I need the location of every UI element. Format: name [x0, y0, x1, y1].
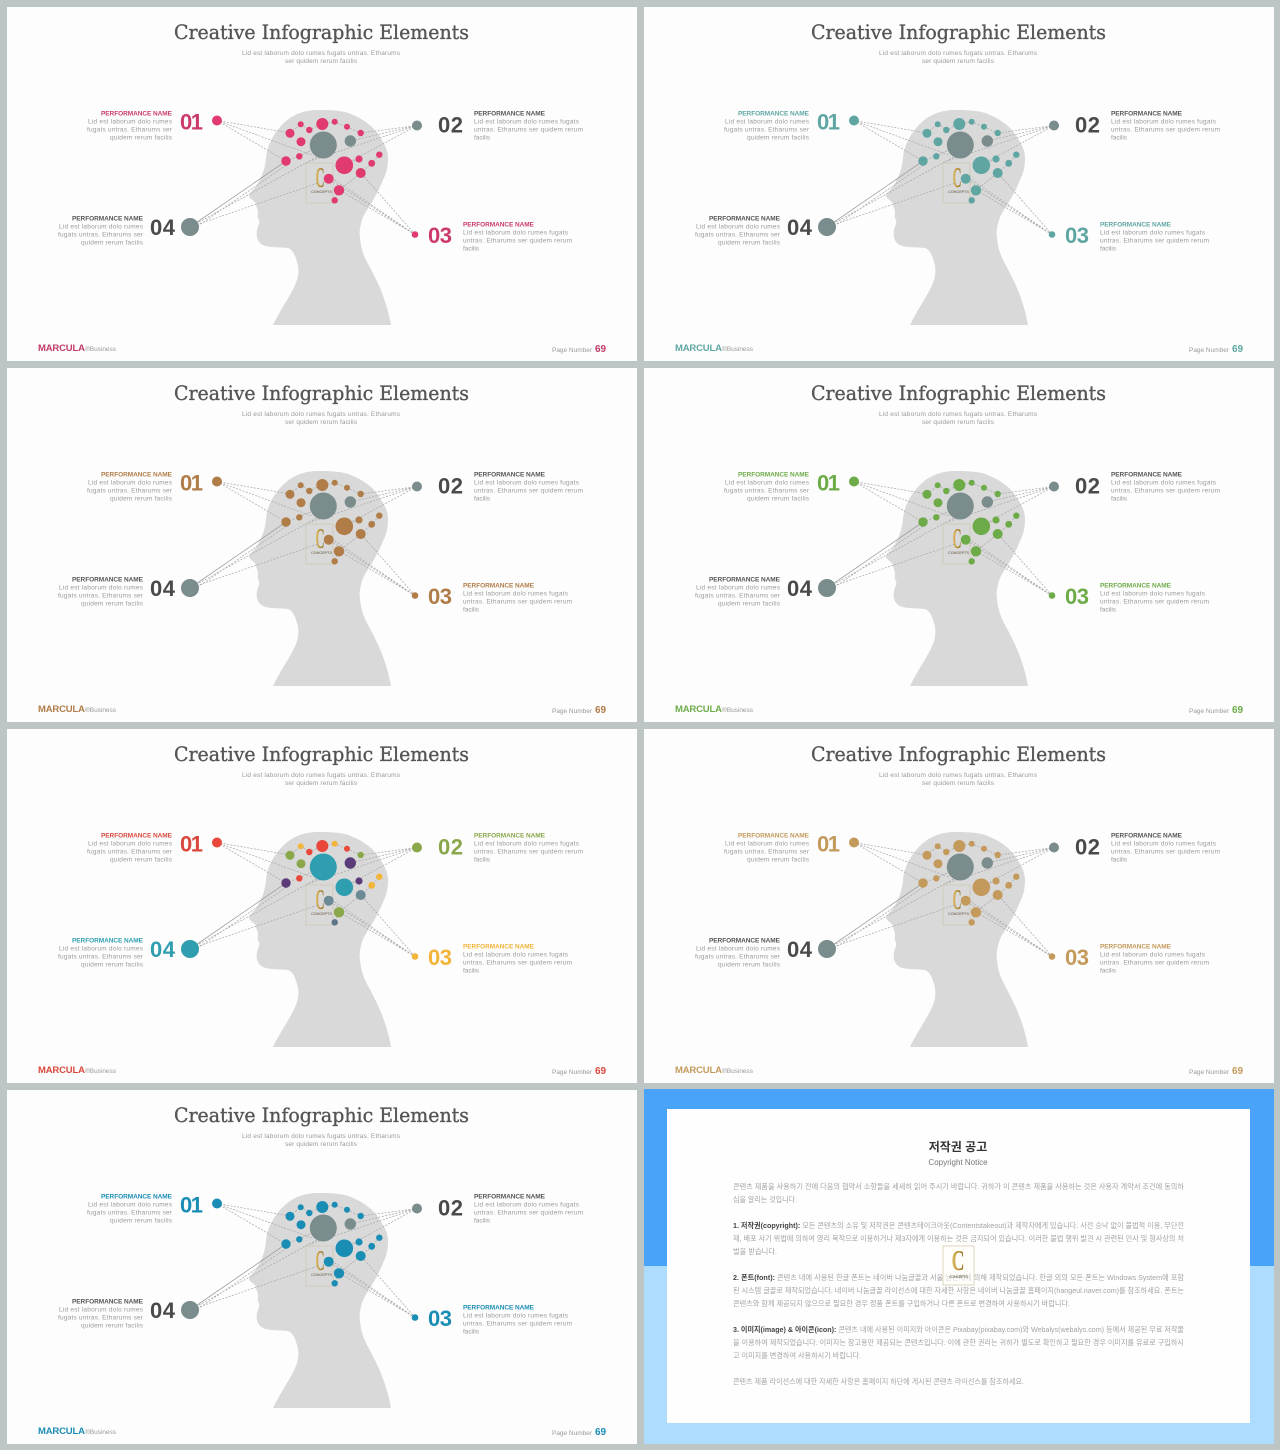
subtitle: Lid est laborum dolo rumes fugats untras. Etharums: [242, 411, 401, 418]
label 02: Lid est laborum dolo rumes fugats: [474, 1202, 580, 1208]
panel 5: multicolour: [7, 729, 637, 1083]
label 01: quidem rerum facilis: [110, 496, 173, 502]
label 03: 03: [1065, 584, 1089, 609]
label 01: Lid est laborum dolo rumes: [725, 118, 810, 126]
panel 8: copyright notice: [644, 1089, 1274, 1444]
footer: 69: [595, 344, 606, 355]
subtitle: Lid est laborum dolo rumes fugats untras. Etharums: [242, 772, 401, 779]
label 01: fugats untras. Etharums ser: [724, 848, 810, 856]
label 02: facilis: [1111, 134, 1128, 142]
footer: 69: [595, 1066, 606, 1077]
footer: MARCULA: [38, 343, 85, 354]
label 04: PERFORMANCE NAME: [72, 216, 144, 222]
notice body: 1. 저작권(copyright): 모든 콘텐츠의 소유 및 저작권은 콘텐츠테이크아웃(Contentstakeout)과 제작자에게 있습니다. 사전 승낙 없이 불법적 이용, 무단전: [733, 1220, 1184, 1230]
label 01: PERFORMANCE NAME: [101, 110, 173, 118]
head with nodes: [818, 110, 1059, 325]
label 04: 04: [787, 937, 813, 962]
label 01: 01: [817, 110, 840, 134]
label 03: facilis: [1100, 968, 1117, 974]
subtitle: [242, 50, 401, 65]
label 01: Lid est laborum dolo rumes: [88, 840, 173, 848]
subtitle: ser quidem rerum facilis: [922, 780, 995, 787]
label 04: fugats untras. Etharums ser: [695, 592, 781, 600]
label 02: PERFORMANCE NAME: [1111, 472, 1183, 478]
panel 6: tan: [644, 729, 1274, 1083]
head with nodes: [181, 471, 422, 686]
label 02: 02: [1075, 112, 1100, 138]
label 01: quidem rerum facilis: [110, 856, 173, 864]
label 03: facilis: [463, 968, 480, 974]
label 01: 01: [817, 832, 840, 856]
label 03: [428, 1304, 572, 1336]
label 04: PERFORMANCE NAME: [72, 576, 144, 584]
panel 2: teal: [644, 7, 1274, 361]
label 03: untras. Etharums ser quidem rerum: [1100, 238, 1209, 244]
label 02: untras. Etharums ser quidem rerum: [474, 126, 583, 134]
label 04: quidem rerum facilis: [81, 600, 144, 608]
label 03: [1065, 944, 1209, 974]
notice body: 콘텐츠 제품 라이선스에 대한 자세한 사항은 홈페이지 하단에 게시된 콘텐츠 라이선스를 참조하세요.: [733, 1376, 1024, 1386]
title: Creative Infographic Elements: [811, 382, 1106, 405]
label 03: [428, 944, 572, 974]
label 03: 03: [428, 584, 452, 609]
label 04: fugats untras. Etharums ser: [58, 954, 144, 960]
label 04: Lid est laborum dolo rumes: [59, 224, 144, 230]
label 03: PERFORMANCE NAME: [1100, 944, 1172, 950]
watermark logo: CONCEPTS: [949, 1274, 968, 1279]
footer: MARCULA: [675, 704, 722, 715]
label 02: [438, 110, 583, 142]
label 03: PERFORMANCE NAME: [463, 1304, 535, 1312]
footer: [38, 704, 606, 716]
label 03: PERFORMANCE NAME: [1100, 222, 1172, 228]
label 02: PERFORMANCE NAME: [474, 110, 546, 118]
label 03: [1065, 582, 1209, 614]
label 01: PERFORMANCE NAME: [101, 472, 173, 478]
label 01: quidem rerum facilis: [110, 134, 173, 142]
label 02: facilis: [474, 134, 491, 142]
label 04: quidem rerum facilis: [718, 240, 781, 246]
label 01: [87, 470, 203, 502]
footer: MARCULA: [38, 1426, 85, 1437]
label 01: quidem rerum facilis: [747, 134, 810, 142]
watermark logo: [943, 1246, 974, 1285]
panel 7: blue: [7, 1090, 637, 1444]
label 03: [428, 582, 572, 614]
label 04: 04: [150, 215, 176, 240]
notice heading: Copyright Notice: [928, 1158, 988, 1167]
label 01: PERFORMANCE NAME: [738, 110, 810, 118]
label 02: PERFORMANCE NAME: [474, 1194, 546, 1200]
footer: 69: [595, 1427, 606, 1438]
label 04: Lid est laborum dolo rumes: [696, 584, 781, 592]
label 01: [724, 110, 840, 142]
head with nodes: [181, 1193, 422, 1408]
subtitle: [242, 1133, 401, 1148]
footer: 69: [595, 705, 606, 716]
label 02: 02: [438, 474, 463, 498]
footer: ®Business: [85, 1067, 117, 1075]
label 01: 01: [180, 1192, 203, 1218]
label 03: facilis: [463, 606, 480, 614]
label 03: [1065, 222, 1209, 252]
label 03: facilis: [463, 246, 480, 252]
label 04: PERFORMANCE NAME: [709, 576, 781, 584]
footer: ®Business: [722, 1067, 754, 1075]
label 01: fugats untras. Etharums ser: [87, 1210, 173, 1216]
label 03: facilis: [463, 1328, 480, 1336]
label 02: untras. Etharums ser quidem rerum: [1111, 488, 1220, 494]
subtitle: [879, 772, 1038, 787]
label 03: Lid est laborum dolo rumes fugats: [1100, 590, 1206, 598]
subtitle: ser quidem rerum facilis: [922, 419, 995, 426]
label 04: [58, 215, 176, 246]
footer: 69: [1232, 1066, 1243, 1077]
panel 4: green: [644, 368, 1274, 722]
notice body: 고 이미지를 변경하여 사용하시기 바랍니다.: [733, 1350, 861, 1360]
subtitle: ser quidem rerum facilis: [285, 419, 358, 426]
footer: 69: [1232, 705, 1243, 716]
label 04: [695, 215, 813, 246]
title: Creative Infographic Elements: [174, 382, 469, 405]
label 03: untras. Etharums ser quidem rerum: [1100, 598, 1209, 606]
subtitle: Lid est laborum dolo rumes fugats untras. Etharums: [879, 772, 1038, 779]
label 01: Lid est laborum dolo rumes: [88, 480, 173, 486]
label 04: fugats untras. Etharums ser: [58, 1314, 144, 1322]
label 02: facilis: [474, 1218, 491, 1224]
label 02: 02: [438, 112, 463, 138]
label 01: Lid est laborum dolo rumes: [88, 1202, 173, 1208]
label 02: 02: [438, 834, 463, 860]
subtitle: [879, 411, 1038, 426]
label 04: 04: [150, 576, 176, 601]
label 03: Lid est laborum dolo rumes fugats: [463, 590, 569, 598]
label 04: PERFORMANCE NAME: [72, 938, 144, 944]
label 04: 04: [787, 215, 813, 240]
footer: MARCULA: [38, 1065, 85, 1076]
label 01: fugats untras. Etharums ser: [87, 126, 173, 134]
label 03: PERFORMANCE NAME: [463, 222, 535, 228]
label 01: quidem rerum facilis: [747, 496, 810, 502]
label 01: fugats untras. Etharums ser: [724, 126, 810, 134]
title: Creative Infographic Elements: [811, 743, 1106, 766]
notice body: 2. 폰트(font): 콘텐츠 내에 사용된 한글 폰트는 네이버 나눔글꼴과 서울 남산체에 의해 제작되었습니다. 한글 외의 모든 폰트는 Windows System에 포함: [733, 1272, 1184, 1282]
label 01: 01: [180, 470, 203, 496]
label 04: PERFORMANCE NAME: [709, 216, 781, 222]
label 02: PERFORMANCE NAME: [474, 832, 546, 840]
subtitle: ser quidem rerum facilis: [285, 58, 358, 65]
label 02: PERFORMANCE NAME: [1111, 110, 1183, 118]
label 04: fugats untras. Etharums ser: [695, 232, 781, 238]
label 03: untras. Etharums ser quidem rerum: [463, 598, 572, 606]
label 03: Lid est laborum dolo rumes fugats: [463, 1312, 569, 1320]
label 02: [1075, 472, 1220, 502]
notice body: 3. 이미지(image) & 아이콘(icon): 콘텐츠 내에 사용된 이미지와 아이콘은 Pixabay(pixabay.com)와 Webalys(webalys.com) 등에서 제공된 무료 저작물: [733, 1324, 1184, 1334]
label 01: [724, 832, 840, 864]
footer: ®Business: [85, 1428, 117, 1436]
label 01: [87, 110, 203, 142]
subtitle: [879, 50, 1038, 65]
panel 1: crimson: [7, 7, 637, 361]
notice heading: [928, 1139, 988, 1167]
label 02: 02: [438, 1196, 463, 1220]
notice body: 심을 알리는 것입니다.: [733, 1194, 797, 1204]
label 02: untras. Etharums ser quidem rerum: [474, 848, 583, 856]
label 02: facilis: [474, 496, 491, 502]
footer: [38, 343, 606, 355]
footer: Page Number: [552, 708, 593, 715]
label 02: [1075, 832, 1220, 864]
notice body: 재, 배포 사기 위법에 의하여 영리 목적으로 이용하거나 제3자에게 이용하는 것은 금지되어 있습니다. 이러한 불법 행위 발견 시 관련된 민사 및 형사상의 처: [733, 1233, 1184, 1243]
footer: Page Number: [1189, 708, 1230, 715]
notice body: 을 이용하여 제작되었습니다. 이미지는 참고용만 제공되는 콘텐츠입니다. 이에 관한 권리는 귀하가 별도로 확인하고 필요한 경우 이미지를 유료로 구입하시: [733, 1337, 1184, 1347]
label 01: 01: [180, 110, 203, 134]
label 01: [87, 1192, 203, 1224]
label 02: [438, 472, 583, 502]
label 04: [58, 1298, 176, 1330]
label 04: [695, 576, 813, 608]
footer: ®Business: [85, 706, 117, 714]
label 03: untras. Etharums ser quidem rerum: [1100, 960, 1209, 966]
label 01: fugats untras. Etharums ser: [724, 488, 810, 494]
label 01: PERFORMANCE NAME: [101, 1194, 173, 1200]
label 04: fugats untras. Etharums ser: [58, 592, 144, 600]
label 01: PERFORMANCE NAME: [738, 832, 810, 840]
label 01: fugats untras. Etharums ser: [87, 488, 173, 494]
label 02: PERFORMANCE NAME: [1111, 832, 1183, 840]
panel 3: brown: [7, 368, 637, 722]
title: Creative Infographic Elements: [811, 21, 1106, 44]
label 01: 01: [817, 470, 840, 496]
label 04: quidem rerum facilis: [81, 962, 144, 968]
subtitle: Lid est laborum dolo rumes fugats untras. Etharums: [879, 50, 1038, 57]
label 02: untras. Etharums ser quidem rerum: [1111, 848, 1220, 856]
subtitle: Lid est laborum dolo rumes fugats untras. Etharums: [242, 1133, 401, 1140]
footer: Page Number: [1189, 347, 1230, 354]
label 03: Lid est laborum dolo rumes fugats: [463, 230, 569, 236]
head with nodes: [818, 471, 1059, 686]
label 03: 03: [428, 223, 452, 248]
label 01: Lid est laborum dolo rumes: [725, 840, 810, 848]
footer: Page Number: [552, 1430, 593, 1437]
title: Creative Infographic Elements: [174, 743, 469, 766]
label 04: Lid est laborum dolo rumes: [59, 584, 144, 592]
label 02: Lid est laborum dolo rumes fugats: [1111, 480, 1217, 486]
notice body: 벌을 받습니다.: [733, 1246, 777, 1256]
label 03: 03: [1065, 945, 1089, 970]
label 04: [58, 576, 176, 608]
title: Creative Infographic Elements: [174, 1104, 469, 1127]
label 02: PERFORMANCE NAME: [474, 472, 546, 478]
subtitle: Lid est laborum dolo rumes fugats untras. Etharums: [242, 50, 401, 57]
label 04: 04: [150, 937, 176, 962]
label 02: [438, 1194, 583, 1224]
label 02: Lid est laborum dolo rumes fugats: [1111, 840, 1217, 848]
label 03: PERFORMANCE NAME: [463, 944, 535, 950]
footer: ®Business: [85, 345, 117, 353]
label 03: facilis: [1100, 246, 1117, 252]
label 02: facilis: [474, 856, 491, 864]
label 02: untras. Etharums ser quidem rerum: [474, 488, 583, 494]
label 01: Lid est laborum dolo rumes: [725, 480, 810, 486]
label 03: untras. Etharums ser quidem rerum: [463, 960, 572, 966]
label 03: Lid est laborum dolo rumes fugats: [463, 952, 569, 958]
label 01: 01: [180, 832, 203, 856]
label 03: Lid est laborum dolo rumes fugats: [1100, 952, 1206, 958]
footer: [38, 1426, 606, 1438]
label 04: quidem rerum facilis: [718, 962, 781, 968]
notice body: 콘텐츠와 함께 제공되지 않으므로 필요한 경우 정품 폰트를 구입하거나 다른 폰트로 변경하여 사용하시기 바랍니다.: [733, 1298, 1070, 1308]
label 04: Lid est laborum dolo rumes: [59, 1306, 144, 1314]
label 04: quidem rerum facilis: [81, 1322, 144, 1330]
label 04: fugats untras. Etharums ser: [58, 232, 144, 238]
footer: MARCULA: [675, 1065, 722, 1076]
subtitle: ser quidem rerum facilis: [285, 780, 358, 787]
label 02: [438, 832, 583, 864]
subtitle: ser quidem rerum facilis: [922, 58, 995, 65]
label 04: [58, 937, 176, 968]
label 02: 02: [1075, 834, 1100, 860]
label 04: quidem rerum facilis: [718, 600, 781, 608]
label 03: 03: [428, 945, 452, 970]
label 01: quidem rerum facilis: [747, 856, 810, 864]
label 04: 04: [150, 1298, 176, 1323]
label 04: PERFORMANCE NAME: [72, 1298, 144, 1306]
footer: Page Number: [1189, 1069, 1230, 1076]
label 04: [695, 937, 813, 968]
label 02: Lid est laborum dolo rumes fugats: [474, 840, 580, 848]
notice heading: 저작권 공고: [929, 1139, 987, 1154]
footer: [38, 1065, 606, 1077]
footer: ®Business: [722, 706, 754, 714]
footer: MARCULA: [38, 704, 85, 715]
label 01: fugats untras. Etharums ser: [87, 848, 173, 856]
notice body: 콘텐츠 제품을 사용하기 전에 다음의 협약서 소항들을 세세히 읽어 주시기 바랍니다. 귀하가 이 콘텐츠 제품을 사용하는 것은 사용자 계약서 조건에 동의하: [733, 1181, 1184, 1191]
label 02: untras. Etharums ser quidem rerum: [474, 1210, 583, 1216]
label 01: Lid est laborum dolo rumes: [88, 118, 173, 126]
label 02: [1075, 110, 1220, 142]
label 03: PERFORMANCE NAME: [1100, 582, 1172, 590]
label 03: 03: [1065, 223, 1089, 248]
label 03: facilis: [1100, 606, 1117, 614]
label 03: untras. Etharums ser quidem rerum: [463, 238, 572, 244]
label 04: 04: [787, 576, 813, 601]
footer: [675, 704, 1243, 716]
label 03: PERFORMANCE NAME: [463, 582, 535, 590]
label 02: facilis: [1111, 856, 1128, 864]
subtitle: ser quidem rerum facilis: [285, 1141, 358, 1148]
subtitle: [242, 411, 401, 426]
head with multicolour nodes: [181, 832, 422, 1047]
label 02: Lid est laborum dolo rumes fugats: [474, 480, 580, 486]
subtitle: [242, 772, 401, 787]
head with nodes: [181, 110, 422, 325]
label 03: 03: [428, 1306, 452, 1331]
notice body: [733, 1181, 1184, 1386]
label 02: facilis: [1111, 496, 1128, 502]
label 04: Lid est laborum dolo rumes: [696, 946, 781, 952]
label 01: PERFORMANCE NAME: [101, 832, 173, 840]
label 01: quidem rerum facilis: [110, 1218, 173, 1224]
label 02: Lid est laborum dolo rumes fugats: [1111, 118, 1217, 126]
footer: MARCULA: [675, 343, 722, 354]
label 01: [87, 832, 203, 864]
label 04: PERFORMANCE NAME: [709, 938, 781, 944]
label 02: Lid est laborum dolo rumes fugats: [474, 118, 580, 126]
label 03: [428, 222, 572, 252]
label 04: Lid est laborum dolo rumes: [59, 946, 144, 952]
footer: [675, 343, 1243, 355]
label 04: quidem rerum facilis: [81, 240, 144, 246]
head with nodes: [818, 832, 1059, 1047]
label 01: PERFORMANCE NAME: [738, 472, 810, 478]
watermark logo: C: [952, 1246, 964, 1277]
label 04: fugats untras. Etharums ser: [695, 954, 781, 960]
notice body: 된 시스템 글꼴로 제작되었습니다. 네이버 나눔글꼴 라이선스에 대한 자세한 사항은 네이버 나눔글꼴 홈페이지(hangeul.naver.com)를 참조하세요. 폰트는: [733, 1285, 1184, 1295]
label 04: Lid est laborum dolo rumes: [696, 224, 781, 230]
footer: Page Number: [552, 347, 593, 354]
label 02: 02: [1075, 474, 1100, 498]
title: Creative Infographic Elements: [174, 21, 469, 44]
label 03: Lid est laborum dolo rumes fugats: [1100, 230, 1206, 236]
footer: [675, 1065, 1243, 1077]
footer: Page Number: [552, 1069, 593, 1076]
label 03: untras. Etharums ser quidem rerum: [463, 1320, 572, 1328]
footer: 69: [1232, 344, 1243, 355]
label 01: [724, 470, 840, 502]
label 02: untras. Etharums ser quidem rerum: [1111, 126, 1220, 134]
footer: ®Business: [722, 345, 754, 353]
subtitle: Lid est laborum dolo rumes fugats untras. Etharums: [879, 411, 1038, 418]
